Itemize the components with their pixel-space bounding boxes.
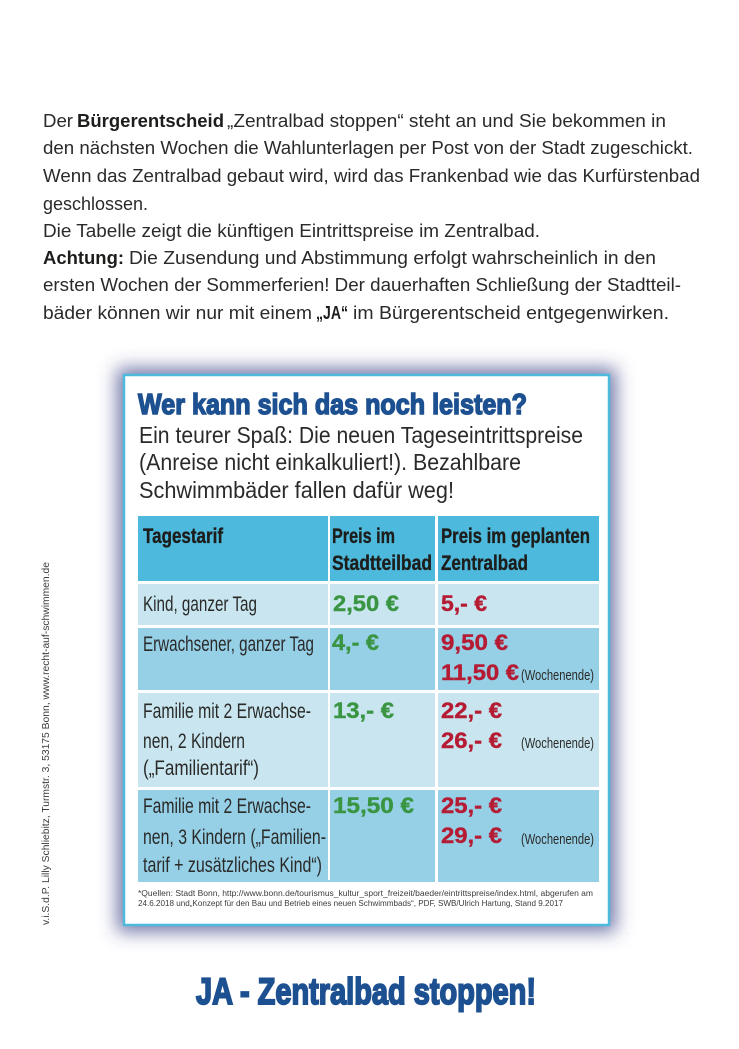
- price table: [138, 516, 599, 882]
- intro text block: Die Zusendung und Abstimmung erfolgt wahrscheinlich in den: [129, 247, 656, 268]
- row: family with 2 children: 26,- €: [441, 728, 503, 753]
- row: family with 3 children: [138, 790, 599, 882]
- source footnote: 24.6.2018 und„Konzept für den Bau und Betrieb eines neuen Schwimmbads“, PDF, SWB/Ulrich Hartung, Stand 9.2017: [138, 898, 563, 908]
- row: adult: [138, 628, 599, 690]
- panel: price card: [117, 368, 616, 932]
- intro text block: Der: [43, 110, 73, 131]
- table header row: Preis im geplanten: [441, 525, 590, 548]
- card subtitle: Schwimmbäder fallen dafür weg!: [139, 477, 454, 503]
- row: family with 3 children: nen, 3 Kindern („Familien-: [143, 826, 326, 849]
- row: adult: 4,- €: [332, 630, 379, 655]
- row: family with 3 children: 25,- €: [441, 793, 503, 818]
- intro text block: im Bürgerentscheid entgegenwirken.: [353, 302, 669, 323]
- row: family with 2 children: („Familientarif“): [143, 757, 259, 780]
- intro text block: Die Tabelle zeigt die künftigen Eintrittspreise im Zentralbad.: [43, 220, 540, 241]
- table header row: Zentralbad: [441, 552, 528, 575]
- row: child: Kind, ganzer Tag: [143, 593, 257, 616]
- row: child: [138, 584, 599, 625]
- row: family with 3 children: tarif + zusätzliches Kind“): [143, 854, 322, 877]
- row: family with 3 children: 15,50 €: [333, 793, 415, 818]
- intro text block: bäder können wir nur mit einem: [43, 302, 312, 323]
- source footnote: *Quellen: Stadt Bonn, http://www.bonn.de/tourismus_kultur_sport_freizeit/baeder/eintrittspreise/index.html, abgerufen am: [138, 888, 593, 898]
- row: family with 2 children: (Wochenende): [521, 736, 594, 752]
- intro text block: Achtung:: [43, 247, 124, 268]
- card heading: Wer kann sich das noch leisten?: [138, 389, 527, 421]
- intro text block: den nächsten Wochen die Wahlunterlagen per Post von der Stadt zugeschickt.: [43, 137, 693, 158]
- intro text block: Bürgerentscheid: [77, 110, 224, 131]
- row: adult: Erwachsener, ganzer Tag: [143, 633, 314, 656]
- source footnote: [138, 888, 593, 908]
- row: child: 2,50 €: [333, 591, 400, 616]
- row: family with 3 children: (Wochenende): [521, 832, 594, 848]
- table header row: [138, 516, 599, 581]
- card subtitle: (Anreise nicht einkalkuliert!). Bezahlbare: [139, 449, 521, 475]
- row: family with 2 children: 22,- €: [441, 698, 503, 723]
- card subtitle: Ein teurer Spaß: Die neuen Tageseintrittspreise: [139, 422, 583, 448]
- row: adult: (Wochenende): [521, 668, 594, 684]
- card subtitle: [139, 422, 583, 503]
- intro text block: [43, 110, 700, 323]
- row: child: 5,- €: [441, 591, 487, 616]
- row: adult: 9,50 €: [441, 630, 509, 655]
- row: family with 2 children: nen, 2 Kindern: [143, 730, 245, 753]
- intro text block: „JA“: [316, 302, 348, 323]
- table header row: Preis im: [332, 525, 395, 548]
- closing slogan: JA - Zentralbad stoppen!: [196, 971, 536, 1012]
- intro text block: geschlossen.: [43, 193, 148, 214]
- card shadow: [117, 368, 616, 932]
- row: family with 3 children: Familie mit 2 Erwachse-: [143, 795, 311, 818]
- intro text block: ersten Wochen der Sommerferien! Der dauerhaften Schließung der Stadtteil-: [43, 274, 681, 295]
- table header row: Tagestarif: [143, 525, 224, 548]
- intro text block: Wenn das Zentralbad gebaut wird, wird das Frankenbad wie das Kurfürstenbad: [43, 165, 700, 186]
- card frame: [124, 375, 609, 925]
- imprint: rotated side text: v.i.S.d.P. Lilly Schliebitz, Turmstr. 3, 53175 Bonn, www.recht-auf-schwimmen.de: [40, 562, 52, 925]
- row: family with 3 children: 29,- €: [441, 823, 503, 848]
- row: family with 2 children: [138, 693, 599, 787]
- row: family with 2 children: 13,- €: [333, 698, 395, 723]
- row: adult: 11,50 €: [441, 660, 520, 685]
- intro text block: „Zentralbad stoppen“ steht an und Sie bekommen in: [227, 110, 666, 131]
- table header row: Stadtteilbad: [332, 552, 432, 575]
- row: family with 2 children: Familie mit 2 Erwachse-: [143, 700, 311, 723]
